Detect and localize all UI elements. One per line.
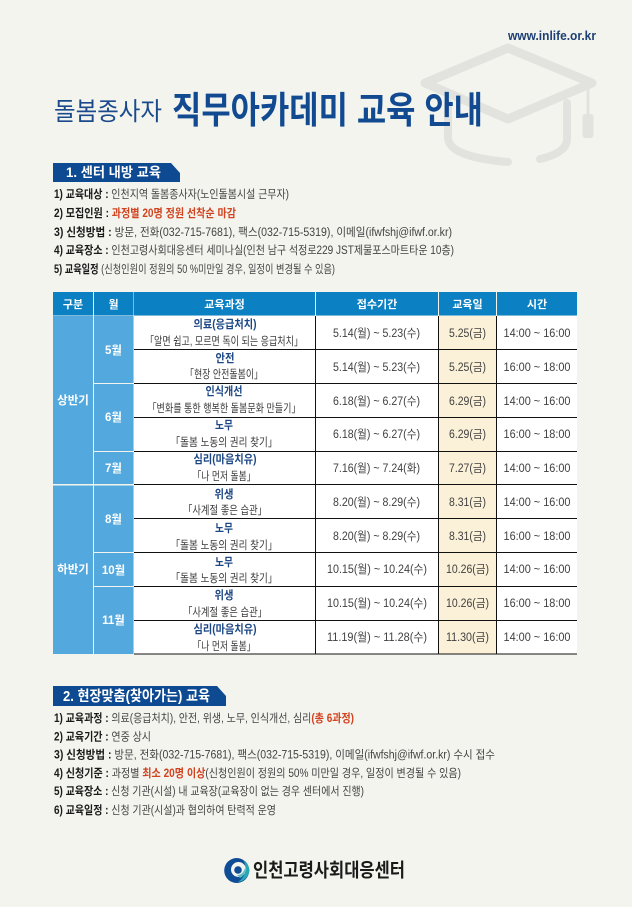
period and month column: 8월 <box>105 512 122 526</box>
registration period column <box>327 327 427 644</box>
education date column: 5.25(금) <box>449 362 486 374</box>
section 2 details: 4) 신청기준 : 과정별 최소 20명 이상(신청인원이 정원의 50% 미만일 경우, 일정이 변경될 수 있음) <box>54 766 461 780</box>
time column: 16:00 ~ 18:00 <box>504 362 570 374</box>
registration period column: 6.18(월) ~ 6.27(수) <box>333 395 420 408</box>
period and month column: 11월 <box>102 613 125 627</box>
period and month column: 5월 <box>105 343 122 357</box>
course column: 위생 <box>214 589 234 602</box>
course column: 심리(마음치유) <box>194 623 257 636</box>
course column: 노무 <box>215 556 233 569</box>
course column: 「나 먼저 돌봄」 <box>192 470 256 483</box>
education date column: 6.29(금) <box>449 429 486 441</box>
section 2 details: 3) 신청방법 : 방문, 전화(032-715-7681), 팩스(032-715-5319), 이메일(ifwfshj@ifwf.or.kr) 수시 접수 <box>54 748 495 762</box>
time column: 14:00 ~ 16:00 <box>504 564 570 576</box>
table header: 접수기간 <box>357 297 397 311</box>
registration period column: 5.14(월) ~ 5.23(수) <box>333 327 420 340</box>
course column: 「현장 안전돌봄이」 <box>185 368 263 381</box>
education date column: 11.30(금) <box>446 632 489 644</box>
time column: 16:00 ~ 18:00 <box>504 598 570 610</box>
education date column: 5.25(금) <box>449 328 486 340</box>
registration period column: 8.20(월) ~ 8.29(수) <box>333 496 420 509</box>
education date column: 8.31(금) <box>449 531 486 543</box>
period and month column <box>53 316 134 654</box>
period and month column: 상반기 <box>57 393 89 407</box>
footer logo: 인천고령사회대응센터 <box>253 860 405 882</box>
registration period column: 10.15(월) ~ 10.24(수) <box>327 597 427 610</box>
time column: 16:00 ~ 18:00 <box>504 429 570 441</box>
period and month column: 6월 <box>105 410 122 424</box>
course column: 「돌봄 노동의 권리 찾기」 <box>170 572 278 585</box>
course column: 「알면 쉽고, 모르면 독이 되는 응급처치」 <box>145 334 303 348</box>
section 1 details: 3) 신청방법 : 방문, 전화(032-715-7681), 팩스(032-715-5319), 이메일(ifwfshj@ifwf.or.kr) <box>54 225 452 239</box>
period and month column: 7월 <box>105 461 122 475</box>
time column: 14:00 ~ 16:00 <box>504 463 570 475</box>
course column: 「사계절 좋은 습관」 <box>183 503 267 517</box>
title: 돌봄종사자 <box>54 98 162 126</box>
time column: 16:00 ~ 18:00 <box>504 531 570 543</box>
education date column: 7.27(금) <box>449 463 486 475</box>
course column: 「변화를 통한 행복한 돌봄문화 만들기」 <box>148 402 300 415</box>
registration period column: 7.16(월) ~ 7.24(화) <box>333 462 420 475</box>
course column <box>145 317 303 653</box>
section 1 heading <box>53 163 180 182</box>
section 1 details: 5) 교육일정 (신청인원이 정원의 50 %미만일 경우, 일정이 변경될 수 있음) <box>54 262 335 276</box>
course column: 「사계절 좋은 습관」 <box>183 605 267 619</box>
table header: 구분 <box>63 298 83 311</box>
section 2 heading: 2. 현장맞춤(찾아가는) 교육 <box>63 688 210 705</box>
education date column: 6.29(금) <box>449 396 486 408</box>
table header: 월 <box>108 297 119 311</box>
time column: 14:00 ~ 16:00 <box>504 396 570 408</box>
registration period column: 10.15(월) ~ 10.24(수) <box>327 563 427 576</box>
course column: 인식개선 <box>206 385 242 398</box>
footer logo <box>224 858 405 883</box>
course column: 「나 먼저 돌봄」 <box>192 640 256 653</box>
section 1 details: 1) 교육대상 : 인천지역 돌봄종사자(노인돌봄시설 근무자) <box>54 187 289 201</box>
education date column: 8.31(금) <box>449 497 486 509</box>
course column: 노무 <box>215 419 233 432</box>
title <box>54 90 483 131</box>
registration period column: 5.14(월) ~ 5.23(수) <box>333 361 420 374</box>
course column: 안전 <box>216 352 234 365</box>
section 1 details: 2) 모집인원 : 과정별 20명 정원 선착순 마감 <box>54 206 236 220</box>
schedule table <box>53 292 577 654</box>
period and month column: 하반기 <box>57 562 89 576</box>
course column: 「돌봄 노동의 권리 찾기」 <box>170 539 278 552</box>
icon: graduation cap watermark <box>425 48 592 162</box>
time column: 14:00 ~ 16:00 <box>504 328 570 340</box>
section 1 details <box>54 187 454 276</box>
course column: 의료(응급처치) <box>194 317 257 331</box>
time column: 14:00 ~ 16:00 <box>504 497 570 509</box>
table header: 교육과정 <box>204 297 245 311</box>
website url: www.inlife.or.kr <box>507 29 596 43</box>
period and month column: 10월 <box>102 563 125 577</box>
education date column <box>446 328 489 644</box>
title: 직무아카데미 교육 안내 <box>172 90 483 131</box>
section 2 details: 5) 교육장소 : 신청 기관(시설) 내 교육장(교육장이 없는 경우 센터에서 진행) <box>54 784 364 798</box>
course column: 위생 <box>214 488 234 501</box>
course column: 노무 <box>215 522 233 535</box>
section 1 heading: 1. 센터 내방 교육 <box>66 165 161 180</box>
education date column: 10.26(금) <box>446 598 489 610</box>
registration period column: 8.20(월) ~ 8.29(수) <box>333 530 420 543</box>
section 2 details: 1) 교육과정 : 의료(응급처치), 안전, 위생, 노무, 인식개선, 심리(총 6과정) <box>54 711 354 725</box>
education date column: 10.26(금) <box>446 564 489 576</box>
registration period column: 11.19(월) ~ 11.28(수) <box>327 631 427 644</box>
registration period column: 6.18(월) ~ 6.27(수) <box>333 428 420 441</box>
table body cells <box>134 316 577 654</box>
course column: 「돌봄 노동의 권리 찾기」 <box>170 436 278 449</box>
section 2 details <box>54 711 495 817</box>
course column: 심리(마음치유) <box>194 453 257 466</box>
icon: center logo <box>224 858 249 883</box>
section 2 details: 2) 교육기간 : 연중 상시 <box>54 730 151 744</box>
time column: 14:00 ~ 16:00 <box>504 632 570 644</box>
table header: 교육일 <box>452 297 483 311</box>
section 2 details: 6) 교육일정 : 신청 기관(시설)과 협의하여 탄력적 운영 <box>54 803 276 817</box>
table header <box>53 292 577 316</box>
section 1 details: 4) 교육장소 : 인천고령사회대응센터 세미나실(인천 남구 석정로229 JST제물포스마트타운 10층) <box>54 243 454 257</box>
table header: 시간 <box>527 298 547 311</box>
time column <box>504 328 570 644</box>
